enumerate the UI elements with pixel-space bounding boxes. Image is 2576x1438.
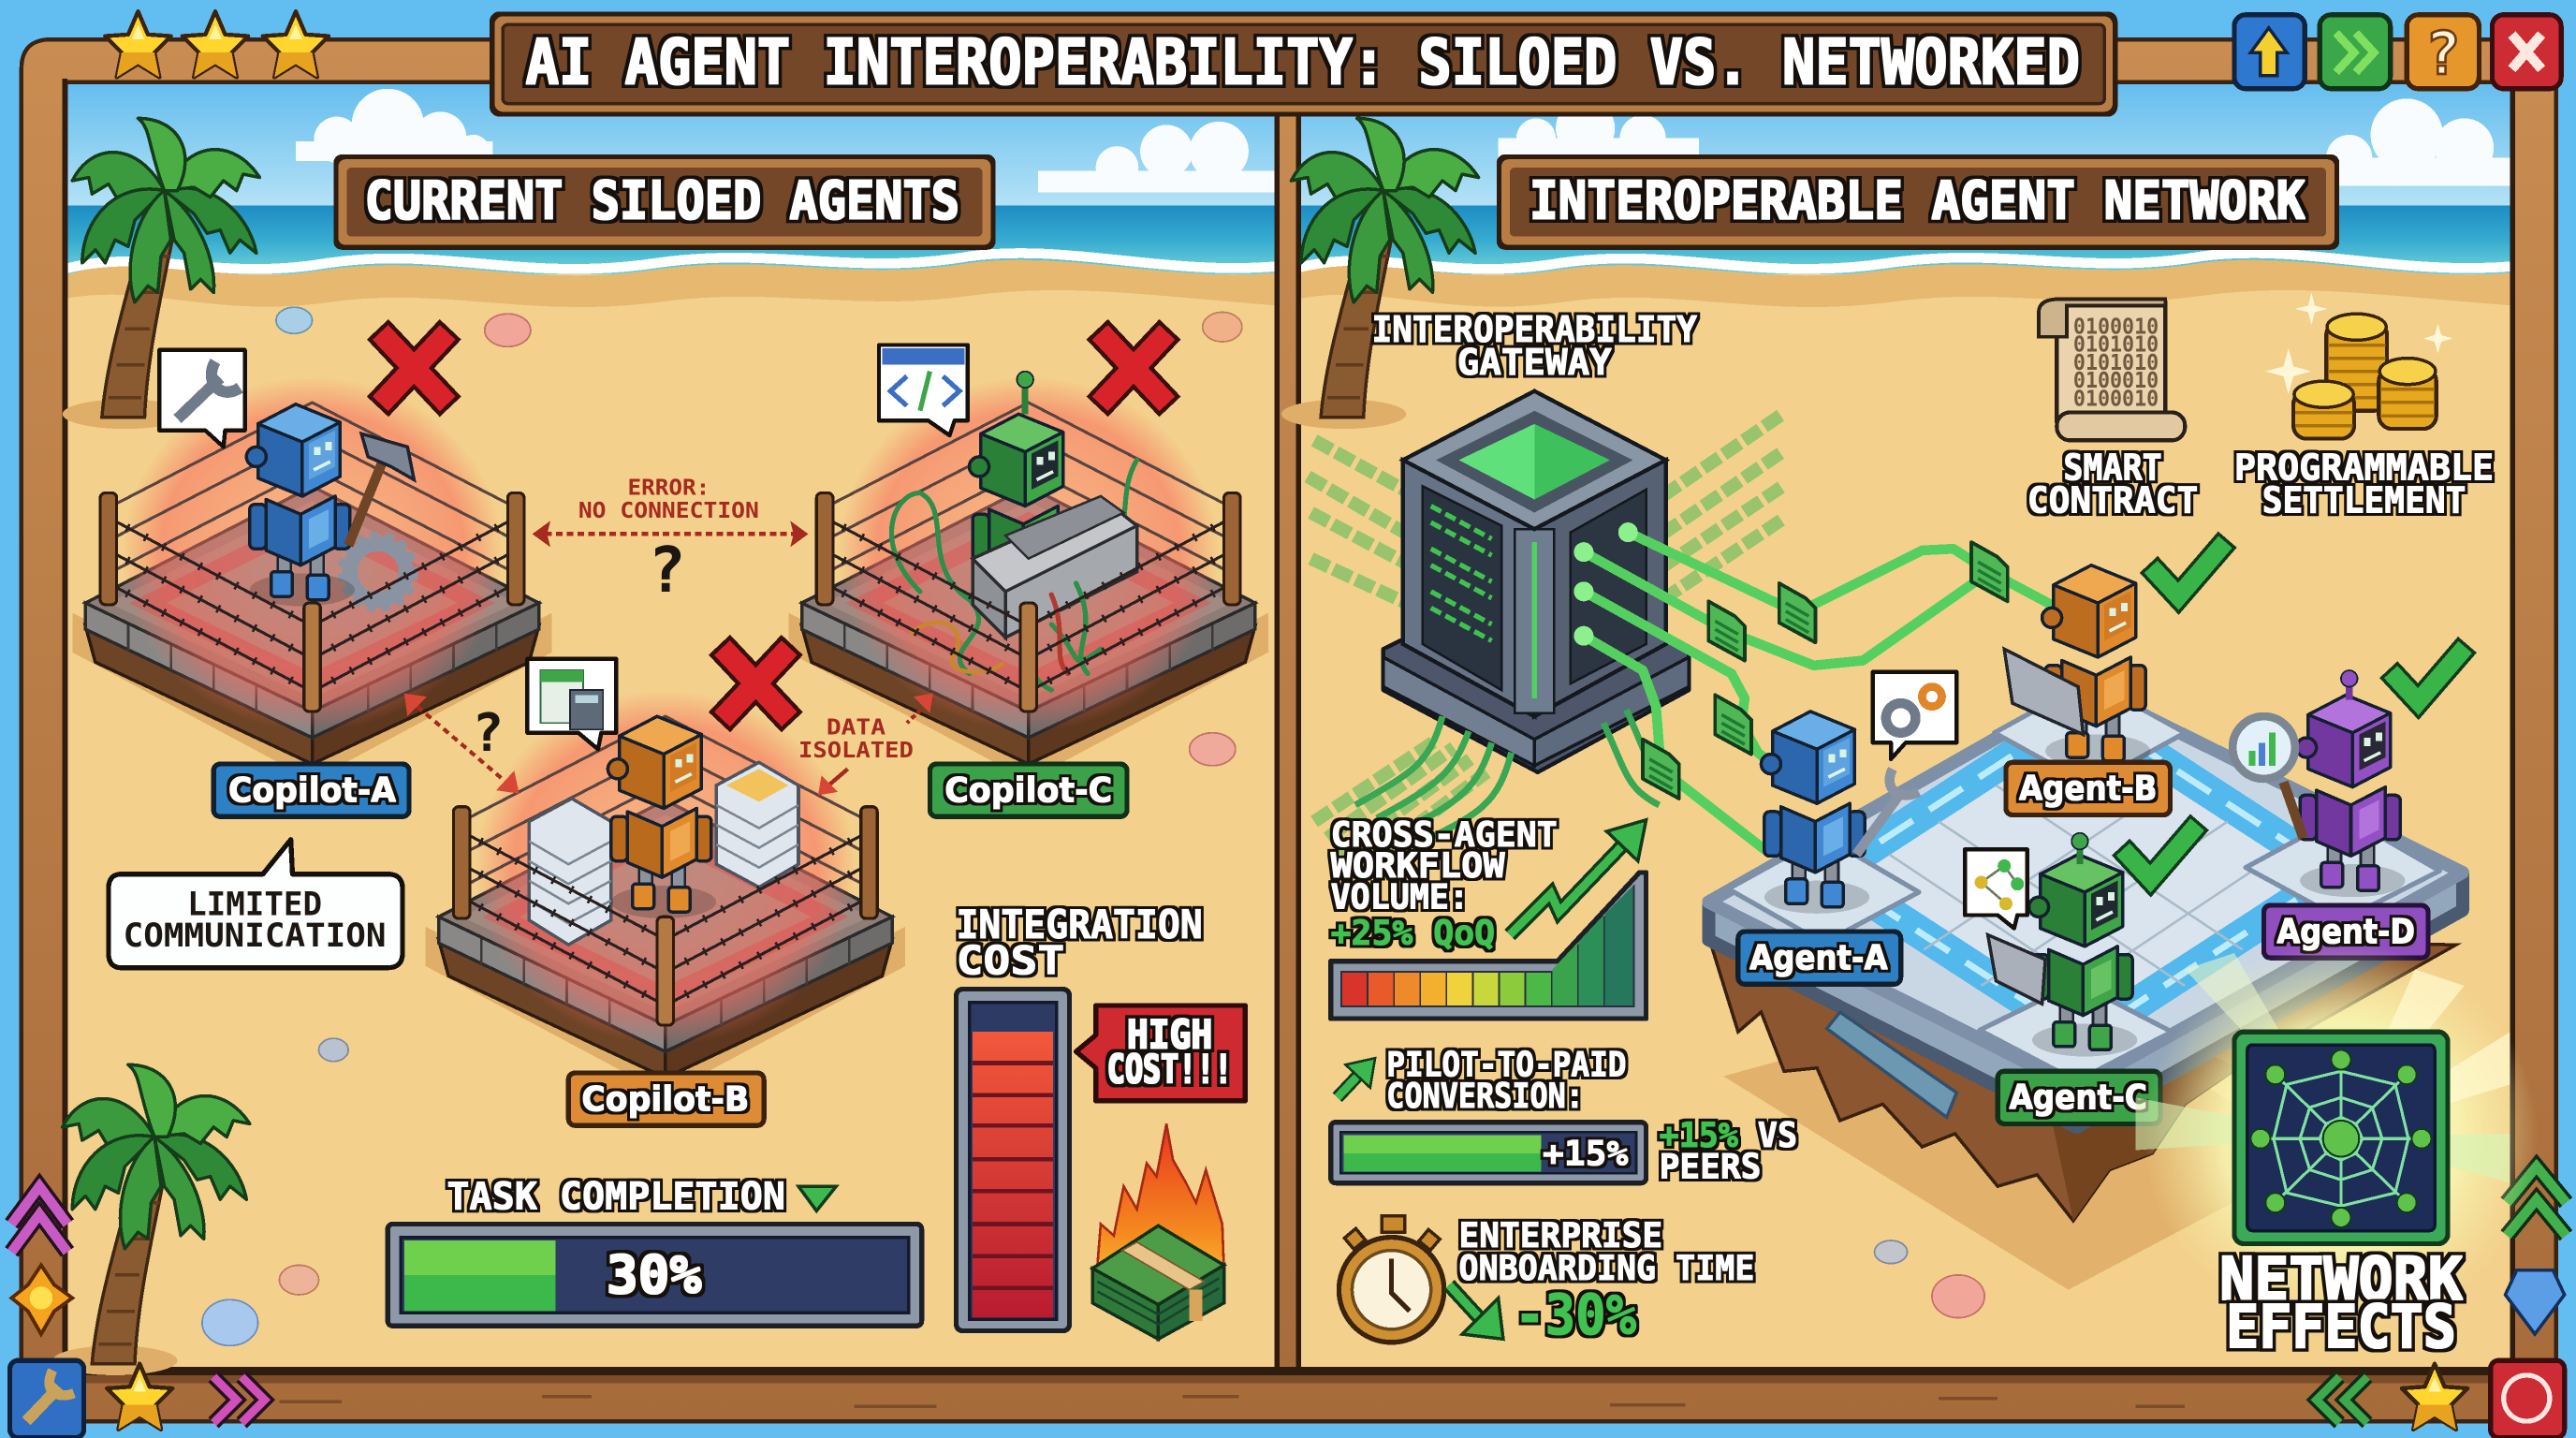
icon: smart contract scroll: 0100010 [2073,315,2159,339]
metric: +15% vs peers [1660,1115,1797,1186]
heading: network effects: EFFECTS [2226,1292,2456,1361]
metric: cross-agent workflow volume heading: WORKFLOW [1331,845,1506,886]
heading: interoperability gateway: GATEWAY [1457,342,1613,384]
robot: Agent-B orange [2004,565,2150,768]
label: programmable settlement [2234,447,2494,522]
icon buttons top right: ? [2425,19,2461,88]
speech bubble: network nodes [1965,849,2027,929]
heading: interoperability gateway [1372,309,1698,384]
island control panel [1827,1012,1956,1117]
floating island [1708,681,2463,1290]
gateway tower [1355,391,1689,842]
label: smart contract [2027,447,2198,522]
label: Copilot-B: Copilot-B [581,1078,749,1119]
desk and keyboard [973,496,1137,690]
title plaque [490,11,2117,117]
label: smart contract: SMART [2063,447,2162,489]
gauge: integration cost [956,990,1070,1331]
growth chart: segmented bar [1331,873,1647,1019]
icon: smart contract scroll [2039,299,2185,440]
callout: limited communication: COMMUNICATION [124,917,386,955]
label: Agent-B: Agent-B [2019,769,2157,809]
label: Agent-D: Agent-D [2277,911,2415,951]
corner pad: agent D [2246,814,2439,920]
icon: down triangle [798,1186,836,1211]
robot: Agent-A blue [1761,712,1919,914]
arrow: Copilot-A to Copilot-B broken link [404,694,520,794]
sign: high cost [1076,1005,1245,1101]
metric: +15% vs peers: +15% VS [1660,1115,1797,1155]
red X: Copilot-A [388,340,440,396]
paper stack right [716,762,798,888]
data isolated label: DATA [827,715,886,740]
gear [342,536,414,608]
label: Copilot-C: Copilot-C [944,770,1112,810]
heading: integration cost: INTEGRATION [956,902,1203,947]
isolated platform: Copilot-B [426,690,905,1094]
green data links from the gateway [1573,522,2063,849]
right heading plaque [1497,154,2339,250]
metric: cross-agent workflow volume heading [1331,814,1558,953]
metric value: +25% QoQ: +25% QoQ [1331,913,1495,953]
metric: +15% vs peers: PEERS [1660,1146,1761,1186]
laptop [1988,935,2045,1004]
label: Agent-B [2006,762,2170,814]
check mark: Agent-D [2397,654,2459,701]
heading: network effects [2219,1244,2463,1361]
speech bubble: wrench [159,350,245,447]
progress bar: pilot conversion +15% [1331,1123,1647,1183]
palm tree: right panel top [1281,118,1479,429]
label: Agent-A [1738,932,1901,984]
data isolated label: ISOLATED [798,739,914,763]
callout: limited communication: LIMITED [187,886,322,924]
heading: integration cost [956,902,1203,984]
arrow: pilot conversion up [1338,1058,1375,1097]
heading: integration cost: COST [956,938,1064,984]
right heading text: INTEROPERABLE AGENT NETWORK [1530,170,2305,231]
corner pad: agent C [1980,983,2172,1081]
isolated platform: Copilot-A [72,376,552,781]
palm tree: left panel bottom [52,1064,250,1375]
metric: pilot-to-paid conversion heading: CONVERSION: [1386,1076,1584,1116]
metric: enterprise onboarding time: ONBOARDING TIME [1459,1248,1754,1288]
corner pad: agent B [1995,681,2185,785]
icon: smart contract scroll: 0101010 [2073,333,2159,358]
progress bar: pilot conversion +15%: +15% [1543,1133,1628,1173]
water channel ring [1830,710,2336,1038]
left heading text: CURRENT SILOED AGENTS [365,170,959,231]
paper stack left [529,799,611,945]
red X: Copilot-C [1107,340,1160,396]
island shadow on sand [1723,986,2317,1290]
island rock underside [1708,936,2456,1221]
sign: high cost: HIGH [1127,1012,1212,1058]
title text: AI AGENT INTEROPERABILITY: SILOED VS. NETWORKED [526,26,2080,99]
bottom left icons [10,1360,265,1438]
label: programmable settlement: SETTLEMENT [2262,480,2466,522]
data documents on the links [1643,542,2008,799]
progress bar: task completion 30%: 30% [607,1245,701,1306]
arrow: no connection between Copilot-A and Copilot-C [533,521,809,547]
heading: interoperability gateway: INTEROPERABILITY [1372,309,1698,351]
shells on the sand: right panel [1875,1240,1984,1318]
label: Copilot-B [568,1073,764,1125]
heading: task completion: TASK COMPLETION [446,1175,785,1219]
label: smart contract: CONTRACT [2027,480,2198,522]
check mark: Agent-B [2157,549,2219,596]
panel: interoperable agent network background [1298,79,2513,1377]
stars: rating top left [105,11,329,77]
progress bar: task completion 30% [388,1224,922,1326]
arrow: onboarding time down [1449,1284,1503,1339]
tile: network effects web icon [2234,1032,2448,1244]
metric: pilot-to-paid conversion heading [1386,1045,1627,1116]
robot: blue with hammer [246,404,414,607]
speech bubble: spreadsheet and calculator [527,659,616,749]
robot: green at desk [970,414,1077,616]
red X: Copilot-B [729,655,782,712]
robot: orange overwhelmed [607,716,716,918]
glow behind network effects tile [2136,943,2539,1331]
shells on the sand: left panel [202,307,1242,1345]
sign: high cost: COST!!! [1107,1047,1232,1093]
robot: Agent-C green [1988,833,2137,1056]
robot: Agent-D purple [2232,670,2405,897]
label: Agent-C [1998,1071,2160,1123]
data streams entering the gateway [1308,414,1782,871]
arrow: growth trend [1510,820,1647,935]
label: programmable settlement: PROGRAMMABLE [2234,447,2494,489]
metric: cross-agent workflow volume heading: VOLUME: [1331,877,1469,917]
label: Agent-D [2263,905,2428,958]
metric: enterprise onboarding time [1459,1215,1754,1348]
laptop [2004,649,2083,734]
label: Agent-C: Agent-C [2009,1078,2147,1118]
label: Agent-A: Agent-A [1749,937,1888,977]
island slab [1708,687,2463,1127]
speech bubble: gears [1873,672,1956,759]
icon: smart contract scroll: 0100010 [2073,369,2159,393]
speech bubble: code [879,345,968,435]
error label: ERROR: [627,476,710,500]
question mark: lower link: ? [472,703,504,764]
left heading plaque [333,154,996,250]
icon: smart contract scroll: 0100010 [2073,387,2159,411]
error label [578,476,759,523]
icon: gold coin stacks [2265,292,2452,439]
label: Copilot-A [213,764,409,816]
callout: limited communication [109,840,402,968]
left rail icons [11,1186,72,1334]
panel: current siloed agents background [63,79,1278,1377]
label: Copilot-A: Copilot-A [228,770,396,810]
wrench [1856,795,1899,855]
check mark: Agent-C [2130,831,2191,879]
corner pad: agent A [1728,836,1919,943]
metric: pilot-to-paid conversion heading: PILOT-TO-PAID [1386,1045,1627,1085]
icon buttons top right [2234,15,2561,89]
tangled cables [891,460,1137,674]
right rail icons [2505,1167,2566,1334]
data isolated label [798,715,914,763]
magnifier with chart [2232,716,2304,838]
isolated platform: Copilot-C [788,372,1268,781]
question mark: ? [649,534,686,607]
arrows: data isolated [818,694,933,795]
metric: cross-agent workflow volume heading: CROSS-AGENT [1331,814,1558,855]
icon: stopwatch [1339,1216,1444,1343]
heading: network effects: NETWORK [2219,1244,2463,1313]
metric: enterprise onboarding time: ENTERPRISE [1459,1215,1662,1255]
palm tree: left panel top [63,118,259,429]
metric value: -30%: -30% [1515,1284,1636,1348]
icon: burning money [1092,1123,1224,1339]
label: Copilot-C [929,764,1127,816]
bottom right icons [2317,1360,2565,1438]
error label: NO CONNECTION [578,499,759,523]
icon: smart contract scroll: 0101010 [2073,351,2159,375]
